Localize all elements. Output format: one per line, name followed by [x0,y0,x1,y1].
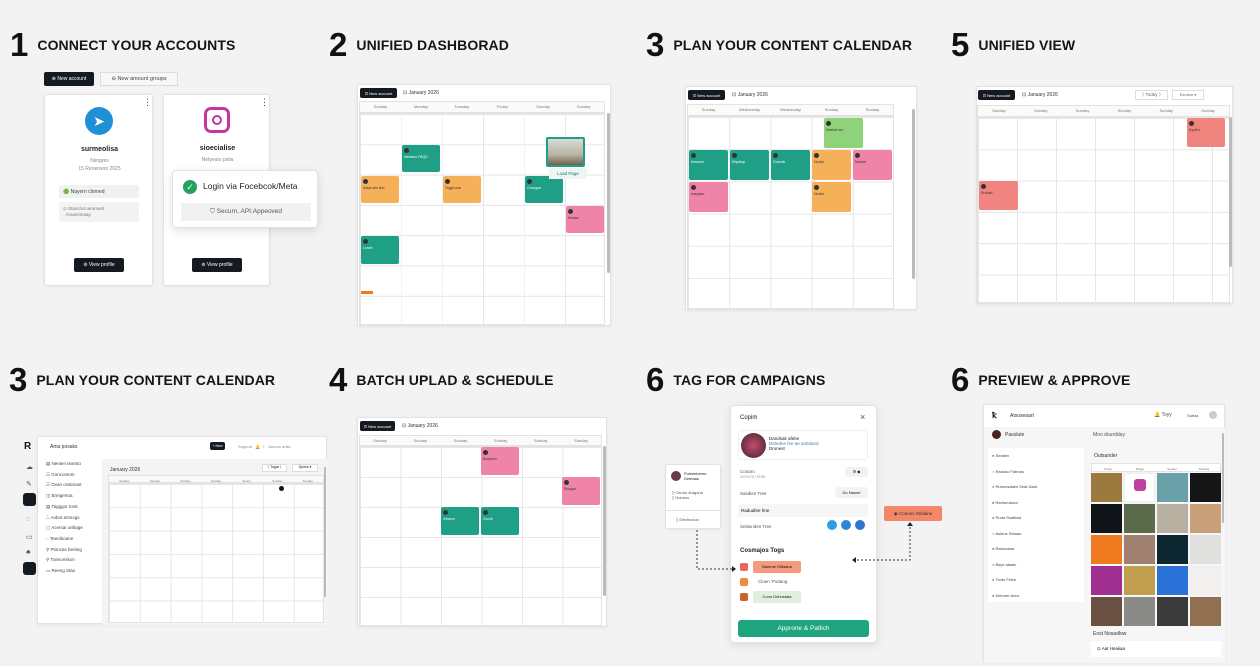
panel: batch upload calendar [357,417,607,627]
panel: batch upload calendar: Sunday [494,438,507,443]
image preview popup [546,137,585,167]
panel: batch upload calendar: Grontl [483,517,493,521]
card: telegram: Nsngres [90,158,109,164]
events [402,145,440,172]
heading 3 [646,26,912,63]
card: telegram [44,94,153,286]
account list: ● Bsye ataaie [992,562,1016,566]
panel: tag for campaigns [665,405,942,647]
panel: batch upload calendar: Sunday [574,438,588,443]
panel: plan content calendar with sidebar: Sunday [180,479,191,483]
heading 6: TAG FOR CAMPAIGNS [673,372,825,388]
account list: ● Rurta Ssatttad [992,515,1021,520]
panel: unified view calendar: Sunday [1034,108,1048,113]
icon: telegram: ➤ [93,113,105,129]
panel: batch upload calendar: Sunday [413,438,427,443]
panel: plan content calendar with sidebar: ▢ Acersar ariltage [46,525,83,530]
heading 1 [10,26,235,63]
panel: plan content calendar with sidebar: Sunday [150,479,160,483]
heading 3: 3 [646,26,664,63]
panel: unified view calendar: ⊡ New account [983,92,1010,98]
main modal: × [860,412,865,422]
panel: plan content calendar: ⊡ January 2026 [732,92,768,98]
panel: plan content calendar: Nachet [855,160,866,164]
panel: unified dashboard calendar: Sunday [536,104,550,109]
panel: batch upload calendar: Sunday [373,438,387,443]
panel: preview & approve: ⊙ Aat Heaiiaa [1097,646,1125,651]
heading 6b: PREVIEW & APPROVE [978,372,1130,388]
panel: unified dashboard calendar: ⊡ January 2026 [403,90,439,96]
side card [665,464,721,529]
card: instagram: Netyears psiia [202,157,233,163]
side card: ▯ Nonaos [672,495,689,500]
sidebar icons [23,441,36,575]
panel: unified view calendar: ⊡ January 2026 [1022,92,1058,98]
tag: campaign [884,506,942,521]
main modal: Sasdien Tree [740,491,767,496]
main modal: Dandsak afebe [769,436,799,441]
panel: preview & approve: Satvilog [1199,467,1209,471]
panel: unified dashboard calendar [357,84,611,326]
icon: check: ✓ [186,182,194,192]
panel: plan content calendar: Imnanot [691,160,704,164]
card: instagram: ⊚ View profile [201,262,233,268]
panel: plan content calendar with sidebar: + New [212,444,223,448]
heading 3b: PLAN YOUR CONTENT CALENDAR [36,372,275,388]
panel: batch upload calendar: Xesenn [443,517,455,521]
account list: ● Rutomsdaes Seat Daat [992,484,1037,489]
account list: ● Rashodaw [992,546,1014,551]
heading 3b [9,361,275,398]
popup: login via facebook: ⛉ Securn, API:Appeoved [210,208,282,215]
panel: unified dashboard calendar: Sunday [374,104,387,109]
panel: unified dashboard calendar: Tuesday [454,104,469,109]
panel: plan content calendar with sidebar: Sunday [303,479,313,483]
main modal: Cuno Dnhostata [763,594,791,599]
account list: ● Sinaten [992,453,1009,458]
main modal: Cloen 'Podang [758,579,787,584]
heading 5 [951,26,1076,63]
panel: preview & approve: Eost Nosadlow [1093,631,1126,637]
card: telegram: ⋮ [143,97,152,107]
icon: check [183,180,197,194]
main modal: Conaro [740,469,755,474]
panel: preview & approve: Satsta [1187,413,1198,418]
main modal: Seecnt rebte [740,474,766,479]
heading 1: CONNECT YOUR ACCOUNTS [37,37,235,53]
heading 6 [646,361,825,398]
panel: plan content calendar with sidebar [23,436,327,624]
button: new account groups [100,72,178,86]
main modal: Raduafee fme [741,508,769,513]
events: Ivyotho [1189,128,1200,132]
button: new account: ⊕ New account [52,76,86,82]
panel: plan content calendar with sidebar: ▭ Reeng Stao [46,568,75,573]
panel: plan content calendar with sidebar: Sunny [242,479,251,483]
panel: plan content calendar with sidebar: ஃ Avbot arimogs [46,515,79,520]
panel: preview & approve: Seeder [1167,467,1177,471]
panel: plan content calendar with sidebar: ▤ Nenten tearsto [46,461,81,466]
panel: plan content calendar with sidebar: ⚲ Ptoncas berting [46,547,82,552]
main modal: ⚙ ◆ [853,469,860,474]
sidebar icons: ▭ [26,534,33,541]
panel: unified dashboard calendar: Load Page [557,171,579,176]
panel: batch upload calendar: Rocgan [564,487,576,491]
sidebar icons: ☁ [26,464,33,471]
panel: plan content calendar with sidebar: ◫ Bretgertoa [46,493,73,498]
panel: preview & approve: Pasolute [1005,432,1024,438]
heading 6b [951,361,1130,398]
main modal: Copim [740,415,757,421]
button: new account [44,72,94,86]
events [824,118,863,148]
panel: plan content calendar: ⊡ New account [693,92,720,98]
heading 6b: 6 [951,361,969,398]
sidebar icons: ◌ [26,516,30,523]
panel: batch upload calendar: ⊡ New account [364,424,391,428]
heading 4: BATCH UPLAD & SCHEDULE [356,372,554,388]
heading 3: PLAN YOUR CONTENT CALENDAR [673,37,912,53]
panel: unified view calendar: 〈 Today 〉 [1140,92,1163,97]
heading 6: 6 [646,361,664,398]
side card: ▯ Cerots dragona [672,490,703,495]
heading 2: 2 [329,26,347,63]
panel: batch upload calendar: Sunday [454,438,467,443]
heading 2: UNIFIED DASHBORAD [356,37,509,53]
events: Bonpeon [483,457,497,461]
panel: preview & approve: Moo dourdday [1093,432,1125,438]
main modal: Selasnden Tree [740,524,772,529]
button: approve & publish [738,620,869,637]
panel: unified dashboard calendar: ⊡ New account [365,90,392,96]
account list: ● Dlenoer Area [992,592,1019,598]
panel: unified view calendar: Sunday [992,108,1006,113]
heading 1: 1 [10,26,28,63]
panel: preview & approve: Atsoseaart [1010,413,1034,419]
card: telegram: 🟢 Nayern clorned [63,189,105,195]
events: Nentano FAQD [404,155,428,159]
panel: preview & approve: Belga [1136,467,1144,471]
events [481,447,519,475]
card: telegram: 15 Reoenson 2025 [78,166,121,172]
panel: unified dashboard calendar: Lsnnh [363,246,373,250]
icon: telegram [85,107,113,135]
arrows [696,522,913,572]
panel: plan content calendar: Ertpstup [732,160,745,164]
tag: campaign: ◉ Coones Oildiane [894,511,932,516]
card: telegram: Anuemmaay [66,212,91,217]
icon: instagram [204,107,230,133]
panel: plan content calendar: Nouful [814,192,824,196]
panel: plan content calendar: Wednesday [739,107,760,112]
side card: ▯ Electeolusi [676,517,699,522]
side card: Deteaas [684,476,699,481]
main modal: Dronest [769,446,785,451]
panel: preview & approve: Tosae [1104,467,1112,471]
panel: unified dashboard calendar: Sunday [577,104,590,109]
panel: batch upload calendar: Sunday [534,438,548,443]
panel: plan content calendar with sidebar: ◌ Teeniboane [46,536,73,541]
panel: preview & approve [983,404,1225,662]
account list [988,448,1084,602]
panel: plan content calendar: Sunday [866,107,879,112]
card: telegram: ⊙ Stanchot wromant [63,206,104,211]
card: telegram: surmeolisa [81,146,118,153]
card: instagram [163,94,270,286]
panel: preview & approve: 🔔 Toyy [1154,412,1172,418]
panel: plan content calendar with sidebar: Ama posaks [50,444,78,450]
panel: plan content calendar [685,86,917,310]
card: instagram: ⋮ [260,97,269,107]
sidebar icons: ♣ [26,549,31,556]
heading 3b: 3 [9,361,27,398]
account list: ● Radoku Fatmas [992,468,1024,474]
card: telegram: ⊚ View profile [83,262,115,268]
main modal [730,405,877,643]
heading 5: 5 [951,26,969,63]
panel: plan content calendar: Wednesday [780,107,801,112]
button: new account groups: ⊖ New amount groups [111,76,167,82]
sidebar icons: ✎ [26,481,32,488]
button: approve & publish: Approne & Patlich [777,625,830,632]
panel: preview & approve: ꝁ [992,411,997,420]
panel: unified view calendar: Exotion ▾ [1180,92,1196,97]
panel: unified view calendar: Sunday [1159,108,1173,113]
main modal: Do Naone [842,490,860,495]
panel: unified dashboard calendar: Toggl ursu [445,186,461,190]
account list: ● Rantorutona [992,500,1018,504]
panel: plan content calendar: Cconab [773,160,785,164]
panel: plan content calendar: Noulul [814,160,824,164]
panel: plan content calendar with sidebar: Sunday [119,479,129,483]
sidebar icons: R [24,441,31,452]
panel: unified view calendar: Sunday [1201,108,1215,113]
panel: unified dashboard calendar: Ienosa [568,216,579,220]
panel: plan content calendar with sidebar: Support 🔔 ☾ Anomo arilis [238,444,290,449]
panel: plan content calendar with sidebar: ☷ Ovan cestmant [46,482,82,487]
panel: plan content calendar: Sunday [702,107,715,112]
panel: unified view calendar: Rrohah [981,191,992,195]
side card: Pubsieberne [684,471,706,476]
panel: connect accounts [44,72,321,286]
panel: plan content calendar with sidebar: Sunday [211,479,221,483]
main modal: Detedne fee ae anbdand [769,441,819,446]
panel: plan content calendar: nsepptur [691,192,705,196]
panel: batch upload calendar: ⊡ January 2026 [402,423,438,429]
panel: plan content calendar with sidebar: 〈 Togat 〉 [266,465,283,469]
heading 4 [329,361,554,398]
events: Noshat sol [826,128,843,132]
panel: unified dashboard calendar: Conogus [527,186,541,190]
panel: plan content calendar with sidebar: Sunday [272,479,282,483]
panel: plan content calendar with sidebar: ⚲ Tuimoriskon [46,557,75,562]
panel: plan content calendar: Sunday [825,107,838,112]
panel: plan content calendar with sidebar: Quess ▾ [299,465,311,469]
account list: ● Tontu Ferta [992,577,1016,582]
panel: plan content calendar with sidebar: ▤ Tagggor torst [46,504,78,509]
heading 5: UNIFIED VIEW [978,37,1075,53]
panel: unified dashboard calendar: Iolsal arls shn [363,186,384,190]
card: instagram: sioecialise [200,145,235,152]
panel: unified view calendar: Sunday [1118,108,1131,113]
main modal: Cosmajos Togs [740,548,784,554]
panel: unified view calendar: Sunday [1076,108,1089,113]
heading 4: 4 [329,361,347,398]
main modal: Bamme Oilfaana [762,564,792,569]
popup: login via facebook: Login via Focebcok/Meta [203,181,298,191]
panel: unified dashboard calendar: Friday [497,104,508,109]
panel: unified dashboard calendar: Monday [414,104,428,109]
events [1187,118,1225,147]
image grid [1091,473,1221,626]
account list: ● Aulens Setaao [992,530,1021,536]
popup: login via facebook [172,170,318,228]
heading 2 [329,26,509,63]
panel: preview & approve: Outsander [1094,453,1117,459]
panel: unified view calendar [976,86,1233,304]
panel: plan content calendar with sidebar: ☷ Goncontom [46,472,75,477]
panel: plan content calendar with sidebar: January 2026 [110,467,140,473]
